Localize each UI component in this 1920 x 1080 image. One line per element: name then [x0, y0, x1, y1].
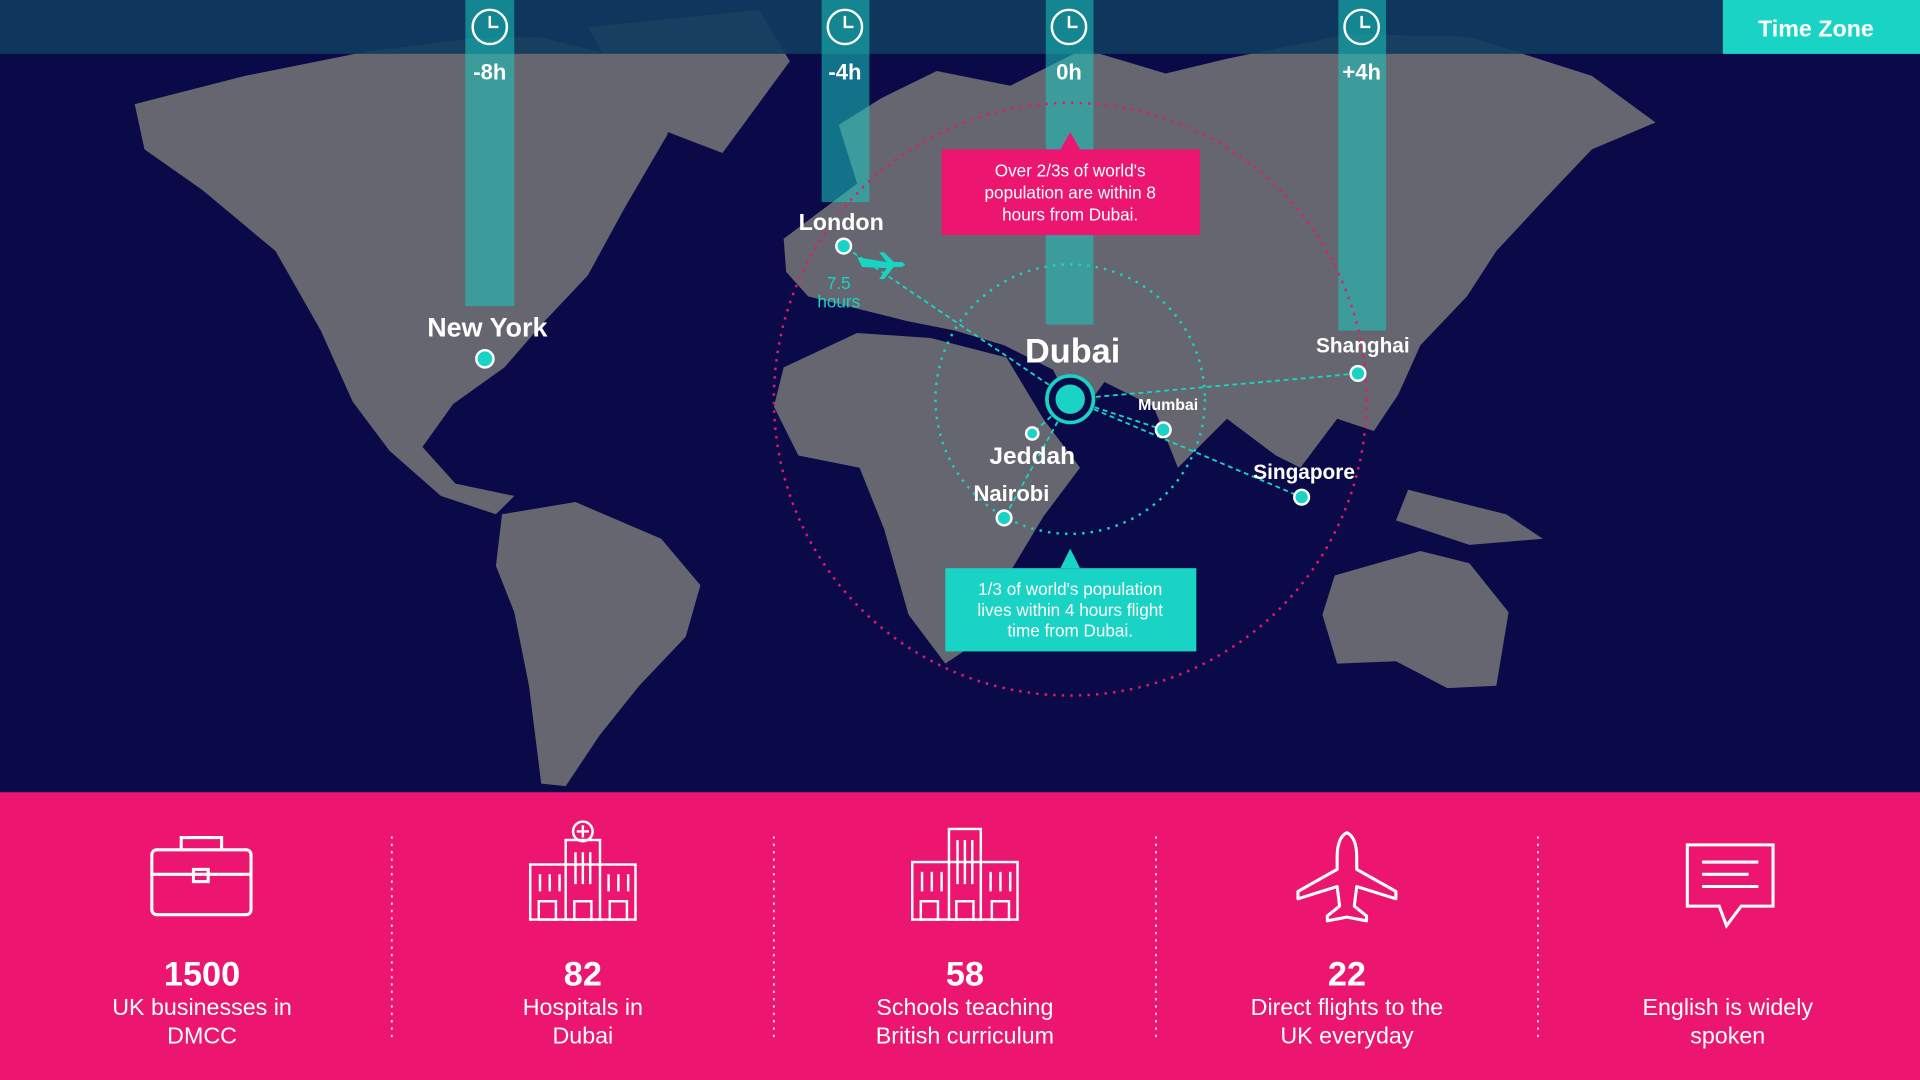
- callout: 4 hours: lives within 4 hours flight: [977, 600, 1163, 620]
- stats text: UK businesses in: [112, 994, 292, 1020]
- city labels: London: [799, 209, 884, 235]
- icon: briefcase: [152, 838, 251, 915]
- timezone column -4h: [822, 0, 869, 202]
- timezone column -8h: -8h: [473, 60, 506, 85]
- city labels: Shanghai: [1316, 335, 1410, 358]
- icon: speech bubble: [1687, 845, 1773, 926]
- stats text: Schools teaching: [876, 994, 1053, 1020]
- timezone column 0h: [1046, 0, 1093, 324]
- flight time label: [817, 273, 860, 311]
- stats text: spoken: [1690, 1022, 1765, 1048]
- stats text: UK everyday: [1280, 1022, 1414, 1048]
- world map: [135, 10, 1656, 786]
- stats text: British curriculum: [876, 1022, 1054, 1048]
- callout: 4 hours: time from Dubai.: [1007, 621, 1133, 641]
- callout: 4 hours: 1/3 of world's population: [978, 579, 1162, 599]
- city labels: Dubai: [1025, 332, 1120, 370]
- time zone label: [1723, 0, 1920, 54]
- stats text: [112, 956, 1813, 1048]
- timezone column 0h: 0h: [1056, 60, 1082, 85]
- city labels: Jeddah: [989, 443, 1075, 470]
- stats text: 82: [564, 956, 602, 994]
- icon: school: [912, 829, 1018, 920]
- stats text: English is widely: [1642, 994, 1813, 1020]
- callout: 8 hours: [942, 132, 1200, 235]
- stats text: 58: [946, 956, 984, 994]
- flight routes: [844, 246, 1358, 518]
- stats text: Dubai: [552, 1022, 613, 1048]
- stats text: 22: [1328, 956, 1366, 994]
- flight time label: 7.5: [827, 273, 851, 293]
- bottom stats band: [0, 792, 1920, 1080]
- icon: airplane: [1298, 833, 1396, 921]
- timezone column +4h: +4h: [1342, 60, 1381, 85]
- top bar: [0, 0, 1920, 54]
- callout: 8 hours: population are within 8: [985, 182, 1156, 202]
- city labels: New York: [427, 313, 547, 343]
- time zone label: Time Zone: [1758, 16, 1874, 42]
- stats text: Direct flights to the: [1251, 994, 1443, 1020]
- stats text: Hospitals in: [523, 994, 643, 1020]
- callout: 8 hours: Over 2/3s of world's: [995, 160, 1146, 180]
- stats text: DMCC: [167, 1022, 237, 1048]
- timezone column +4h: [1338, 0, 1386, 331]
- city labels: Nairobi: [973, 481, 1049, 506]
- city labels: Singapore: [1253, 461, 1355, 484]
- city markers: [476, 239, 1365, 525]
- stats text: 1500: [164, 956, 240, 994]
- city labels: [427, 209, 1410, 506]
- plane icon: [857, 252, 905, 279]
- flight time label: hours: [817, 291, 860, 311]
- icon: hospital: [530, 822, 636, 920]
- range circles: [774, 103, 1367, 696]
- timezone column -8h: [465, 0, 514, 306]
- dubai marker: [1047, 376, 1093, 422]
- timezone column -4h: -4h: [828, 60, 861, 85]
- callout: 4 hours: [945, 549, 1196, 651]
- city labels: Mumbai: [1138, 397, 1198, 414]
- callout: 8 hours: hours from Dubai.: [1002, 204, 1138, 224]
